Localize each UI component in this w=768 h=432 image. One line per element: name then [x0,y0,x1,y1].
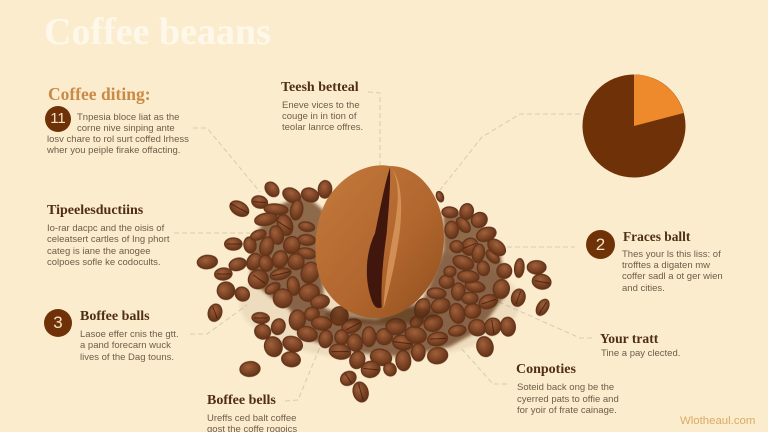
heading and body 3: lives of the Dag touns. [80,352,174,363]
text block: your tratt [600,331,680,359]
text block: tipeelesductiins: categ is iane the anogee [47,246,151,257]
heading and body 3: a pand forecarn wuck [80,340,171,351]
heading and body 2: trofftes a digaten mw [622,260,710,271]
body text 1: corne nive sinping ante [77,123,175,134]
text block: conpoties: for yoir of frate cainage. [517,405,617,416]
body text 1: Tnpesia bloce liat as the [77,112,179,123]
heading and body 2: and cities. [622,283,665,294]
body text 1: wher you peiple firake offacting. [47,145,180,156]
heading and body 2: Fraces ballt [623,229,690,244]
pie chart [582,74,686,178]
heading and body 3 [80,309,179,363]
section heading: coffee diting: Coffee diting: [48,84,151,104]
heading and body 3: Lasoe effer cnis the gtt. [80,329,179,340]
dashed connector lines [174,92,592,401]
heading and body 2: Thes your ls this liss: of [622,249,721,260]
text block: tipeelesductiins: celeatsert cartles of Ing phort [47,234,170,245]
badge 1 [45,106,71,132]
badge 1: 11 [50,110,66,127]
title: Coffee beaans [44,11,271,53]
text block: your tratt: Tine a pay clected. [601,348,680,359]
heading and body 3: Boffee balls [80,309,150,324]
text block: teesh betteal [281,80,363,133]
text block 3: boffee balls [44,309,179,363]
badge 3 [44,309,72,337]
bean creases [213,202,549,401]
coffee bean pile [197,165,552,404]
text block: conpoties: Conpoties [516,362,576,377]
watermark: Wlotheaul.com [680,415,755,427]
text block 1 [45,106,189,156]
text block: conpoties: cyerred pats to offie and [517,394,619,405]
text block 2: fraces ballt [586,229,723,294]
badge 2: 2 [596,235,605,254]
heading and body 2 [622,229,723,294]
text block: conpoties: Soteid back ong be the [517,382,614,393]
large central coffee bean [315,165,444,324]
text block: teesh betteal: Eneve vices to the [282,100,360,111]
badge 2 [586,230,615,259]
body text 1 [47,112,189,156]
heading and body 2: coffer sadl a ot ger wien [622,271,723,282]
text block: conpoties [516,362,619,416]
body text 1: losv chare to rol surt coffed lrhess [47,134,189,145]
text block: boffee bells: Ureffs ced balt coffee [207,413,296,424]
text block: teesh betteal: Teesh betteal [281,80,359,95]
text block: tipeelesductiins: Io-rar dacpc and the oisis of [47,223,164,234]
text block: tipeelesductiins [47,203,170,268]
text block: tipeelesductiins: Tipeelesductiins [47,203,143,218]
badge 3: 3 [53,313,63,332]
text block: your tratt: Your tratt [600,331,658,346]
text block: tipeelesductiins: colpoes sofle ke codocults. [47,257,161,268]
text block: teesh betteal: teolar lanrce offres. [282,122,363,133]
text block: boffee bells: Boffee bells [207,393,276,408]
text block: teesh betteal: couge in in tion of [282,111,356,122]
text block: boffee bells [207,393,297,432]
